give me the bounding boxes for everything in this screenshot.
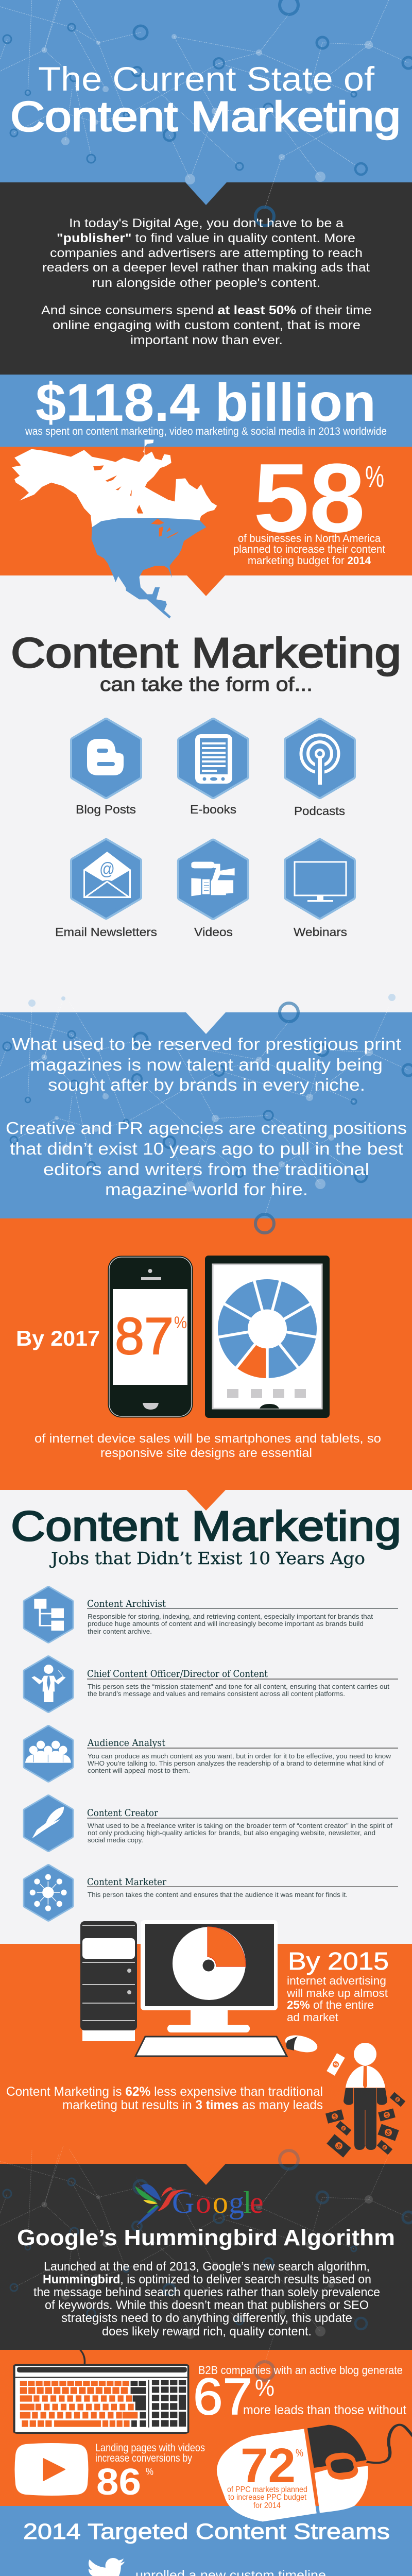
icon: videos: [181, 842, 246, 917]
logo: google hummingbird: [135, 2173, 264, 2226]
text block: hummingbird: strategists need to do anything differently, this update: [61, 2311, 352, 2325]
panel: content forms background: [0, 575, 412, 1034]
by 2017 statistic: [16, 1326, 381, 1460]
heading: jobs: Content Marketing: [11, 1503, 401, 1550]
by 2015 statistic: 25% of the entire: [287, 1998, 374, 2011]
job: content marketer: This person takes the content and ensures that the audience it was meant for finds it.: [88, 1891, 348, 1899]
statistic: 72 percent: of PPC markets planned: [227, 2485, 307, 2494]
statistic: 72 percent: [227, 2438, 307, 2510]
icon: computer mouse: [217, 2425, 412, 2521]
statistic: 67 percent: [193, 2364, 406, 2426]
panel: by 2015 background: [0, 1944, 412, 2185]
labels: content forms: Podcasts: [294, 804, 345, 818]
logo: google hummingbird: G: [172, 2185, 194, 2219]
icon: keyboard: [13, 2350, 189, 2434]
icon: video player: [14, 2443, 89, 2496]
spend statistic: was spent on content marketing, video marketing & social media in 2013 worldwide: [25, 426, 387, 437]
logo: google hummingbird: g: [229, 2185, 244, 2219]
logo: google hummingbird: l: [243, 2185, 252, 2219]
by 2015 statistic: ad market: [287, 2011, 338, 2024]
icon: monitor with pie chart: [141, 1920, 278, 2032]
job: content archivist: their content archive.: [88, 1628, 152, 1635]
job: content creator: Content Creator: [87, 1807, 159, 1819]
job: content archivist: [25, 1588, 398, 1641]
text block: print magazines: sought after by brands in every niche.: [48, 1075, 365, 1094]
text block: print magazines: editors and writers from the traditional: [43, 1160, 369, 1179]
icon: businessman with money: $: [395, 2097, 400, 2102]
58 percent statistic: %: [365, 460, 384, 494]
statistic: 72 percent: 72: [241, 2438, 296, 2493]
icon: businessman with money: $: [333, 2113, 337, 2121]
text block: print magazines: magazine world for hire.: [105, 1180, 308, 1199]
heading: content marketing forms: Content Marketing: [11, 630, 401, 676]
job: audience analyst: WHO you’re talking to. This person analyzes the readership of a brand to determine what kind of: [88, 1759, 384, 1767]
text block: hummingbird: Launched at the end of 2013, Google’s new search algorithm,: [44, 2260, 370, 2274]
by 2017 statistic: of internet device sales will be smartphones and tablets, so: [35, 1432, 381, 1446]
icon: email newsletters: [74, 842, 139, 916]
heading: jobs: Jobs that Didn’t Exist 10 Years Ago: [49, 1548, 365, 1568]
statistic: 67 percent: 67: [193, 2368, 252, 2426]
job: chief content officer: Chief Content Officer/Director of Content: [87, 1668, 268, 1680]
title: [10, 60, 401, 140]
job: chief content officer: This person sets the “mission statement” and tone for all content, ensuring that content carries out: [88, 1683, 389, 1690]
text block: print magazines: What used to be reserved for prestigious print: [12, 1035, 401, 1054]
icon: email newsletters: @: [99, 859, 115, 879]
by 2015 statistic: [286, 1948, 389, 2024]
statistic: 67 percent: %: [255, 2375, 274, 2401]
icon: keyboard and mouse: [135, 2032, 319, 2056]
heading: targeted content streams: 2014 Targeted Content Streams: [23, 2519, 390, 2544]
job: content creator: What used to be a freelance writer is taking on the broader term of “content creator” in the spirit of: [88, 1822, 392, 1829]
intro text: [41, 216, 372, 347]
58 percent statistic: of businesses in North America: [238, 533, 381, 545]
by 2015 statistic: By 2015: [288, 1948, 389, 1975]
heading: content marketing forms: can take the form of...: [100, 674, 313, 696]
text block: hummingbird: the message behind search queries rather than solely prevalence: [33, 2285, 380, 2299]
statistic: 67 percent: more leads than those without: [243, 2403, 406, 2417]
intro text: "publisher" to find value in quality content. More: [57, 231, 355, 245]
intro text: run alongside other people's content.: [92, 276, 320, 290]
58 percent statistic: 58: [253, 444, 365, 553]
panel: statistics background: [0, 2350, 412, 2506]
job: content archivist: produce huge amounts of content and will increasingly become important as brands build: [88, 1620, 364, 1628]
panel: print magazines background: [0, 1012, 412, 1218]
icon: computer tower: [80, 1921, 137, 2041]
icon: smartphone: %: [174, 1313, 187, 1332]
statistic: 86 percent: 86: [96, 2462, 141, 2503]
icon: smartphone: 87: [115, 1308, 174, 1365]
icon: businessman with money: $: [333, 2062, 340, 2067]
icon: podcasts: [287, 721, 352, 795]
job: chief content officer: the brand’s message and values and remains consistent across all content platforms.: [88, 1690, 345, 1698]
icon: businessman with money: $: [385, 2128, 392, 2137]
intro text: important now than ever.: [130, 333, 283, 347]
title: Content Marketing: [10, 93, 401, 140]
job: content marketer: Content Marketer: [87, 1876, 167, 1888]
text block: print magazines: magazines is now talent and quality being: [30, 1055, 383, 1074]
panel: spend background: [0, 375, 412, 447]
panel: by 2017 background: [0, 1218, 412, 1511]
58 percent statistic: marketing budget for 2014: [248, 555, 371, 567]
panel: intro background: [0, 182, 412, 375]
job: content creator: [25, 1797, 398, 1850]
statistic: 72 percent: to increase PPC budget: [228, 2493, 306, 2502]
icon: businessman with money: $: [382, 2145, 387, 2150]
labels: content forms: Email Newsletters: [55, 925, 157, 939]
job: audience analyst: Audience Analyst: [87, 1737, 165, 1749]
icon: businessman with money: $: [335, 2142, 343, 2150]
statistic: 86 percent: %: [146, 2466, 153, 2478]
intro text: online engaging with custom content, that is more: [53, 318, 360, 332]
text block: less expensive: [6, 2084, 323, 2112]
58 percent statistic: planned to increase their content: [233, 544, 385, 555]
icon: e-books: [181, 721, 246, 795]
icon: businessman with money: $: [385, 2112, 389, 2119]
panel: hero background: [0, 0, 412, 205]
statistic: 72 percent: for 2014: [253, 2501, 281, 2510]
text block: hummingbird: [33, 2260, 380, 2338]
heading: content marketing forms: [11, 630, 401, 696]
panel: targeted content streams background: [0, 2506, 412, 2576]
icon: businessman with money: [325, 2043, 405, 2158]
text block: less expensive: marketing but results in 3 times as many leads: [62, 2098, 323, 2112]
panel: jobs background: [0, 1490, 412, 1944]
logo: google hummingbird: e: [250, 2185, 264, 2219]
job: content creator: social media copy.: [88, 1836, 143, 1844]
panel: 58 percent background: [0, 447, 412, 596]
by 2017 statistic: By 2017: [16, 1326, 100, 1350]
job: audience analyst: content will appeal most to them.: [88, 1767, 190, 1774]
statistic: 86 percent: increase conversions by: [95, 2452, 192, 2464]
text block: hummingbird: of keywords. While this doesn’t mean that publishers or SEO: [45, 2298, 369, 2312]
heading: jobs: [11, 1503, 401, 1568]
statistic: 86 percent: Landing pages with videos: [95, 2442, 205, 2454]
icon: smartphone: [108, 1256, 193, 1418]
job: audience analyst: You can produce as much content as you want, but in order for it to be effective, you need to know: [88, 1752, 391, 1760]
labels: content forms: E-books: [190, 803, 236, 816]
panel: hummingbird background: [0, 2164, 412, 2350]
job: content archivist: Content Archivist: [87, 1598, 166, 1609]
title: The Current State of: [38, 60, 375, 98]
logo: google hummingbird: o: [196, 2185, 211, 2219]
intro text: In today's Digital Age, you don't have to be a: [69, 216, 344, 230]
icon: webinars: [287, 842, 352, 916]
text block: less expensive: Content Marketing is 62% less expensive than traditional: [6, 2084, 323, 2099]
by 2017 statistic: responsive site designs are essential: [100, 1446, 312, 1460]
logo: google hummingbird: o: [213, 2185, 228, 2219]
job: content archivist: Responsible for storing, indexing, and retrieving content, especially important for brands that: [88, 1613, 373, 1620]
text block: hummingbird: Hummingbird, is optimized to deliver search results based on: [43, 2273, 371, 2286]
statistic: 72 percent: %: [296, 2447, 303, 2459]
text block: print magazines: Creative and PR agencies are creating positions: [6, 1118, 407, 1138]
intro text: And since consumers spend at least 50% of their time: [41, 303, 372, 317]
job: content creator: not only producing high-quality articles for brands, but also engaging website, newsletter, and: [88, 1829, 375, 1837]
icon: twitter: [87, 2558, 125, 2576]
map: North America: [12, 439, 217, 619]
heading: hummingbird: Google’s Hummingbird Algorithm: [17, 2225, 395, 2250]
job: audience analyst: [25, 1727, 398, 1780]
intro text: readers on a deeper level rather than making ads that: [42, 261, 370, 275]
labels: content forms: [55, 803, 347, 939]
job: content marketer: [25, 1867, 398, 1919]
icon: blog posts: [74, 721, 139, 795]
icon: businessman with money: $: [341, 2126, 346, 2131]
text block: hummingbird: does likely reward rich, quality content.: [102, 2325, 312, 2338]
by 2015 statistic: internet advertising: [287, 1974, 386, 1987]
labels: content forms: Videos: [194, 925, 233, 939]
icon: tablet with donut chart: [205, 1256, 330, 1418]
job: chief content officer: [25, 1658, 398, 1710]
by 2015 statistic: will make up almost: [286, 1987, 388, 1999]
labels: content forms: Blog Posts: [76, 803, 136, 816]
statistic: 86 percent: [95, 2442, 205, 2503]
text block: print magazines: that didn’t exist 10 years ago to pull in the best: [10, 1139, 403, 1158]
58 percent statistic: [233, 444, 385, 567]
labels: content forms: Webinars: [294, 925, 347, 939]
text block: print magazines: [6, 1035, 407, 1199]
intro text: companies and advertisers are attempting to reach: [50, 246, 363, 260]
spend statistic: $118.4 billion: [36, 373, 376, 433]
